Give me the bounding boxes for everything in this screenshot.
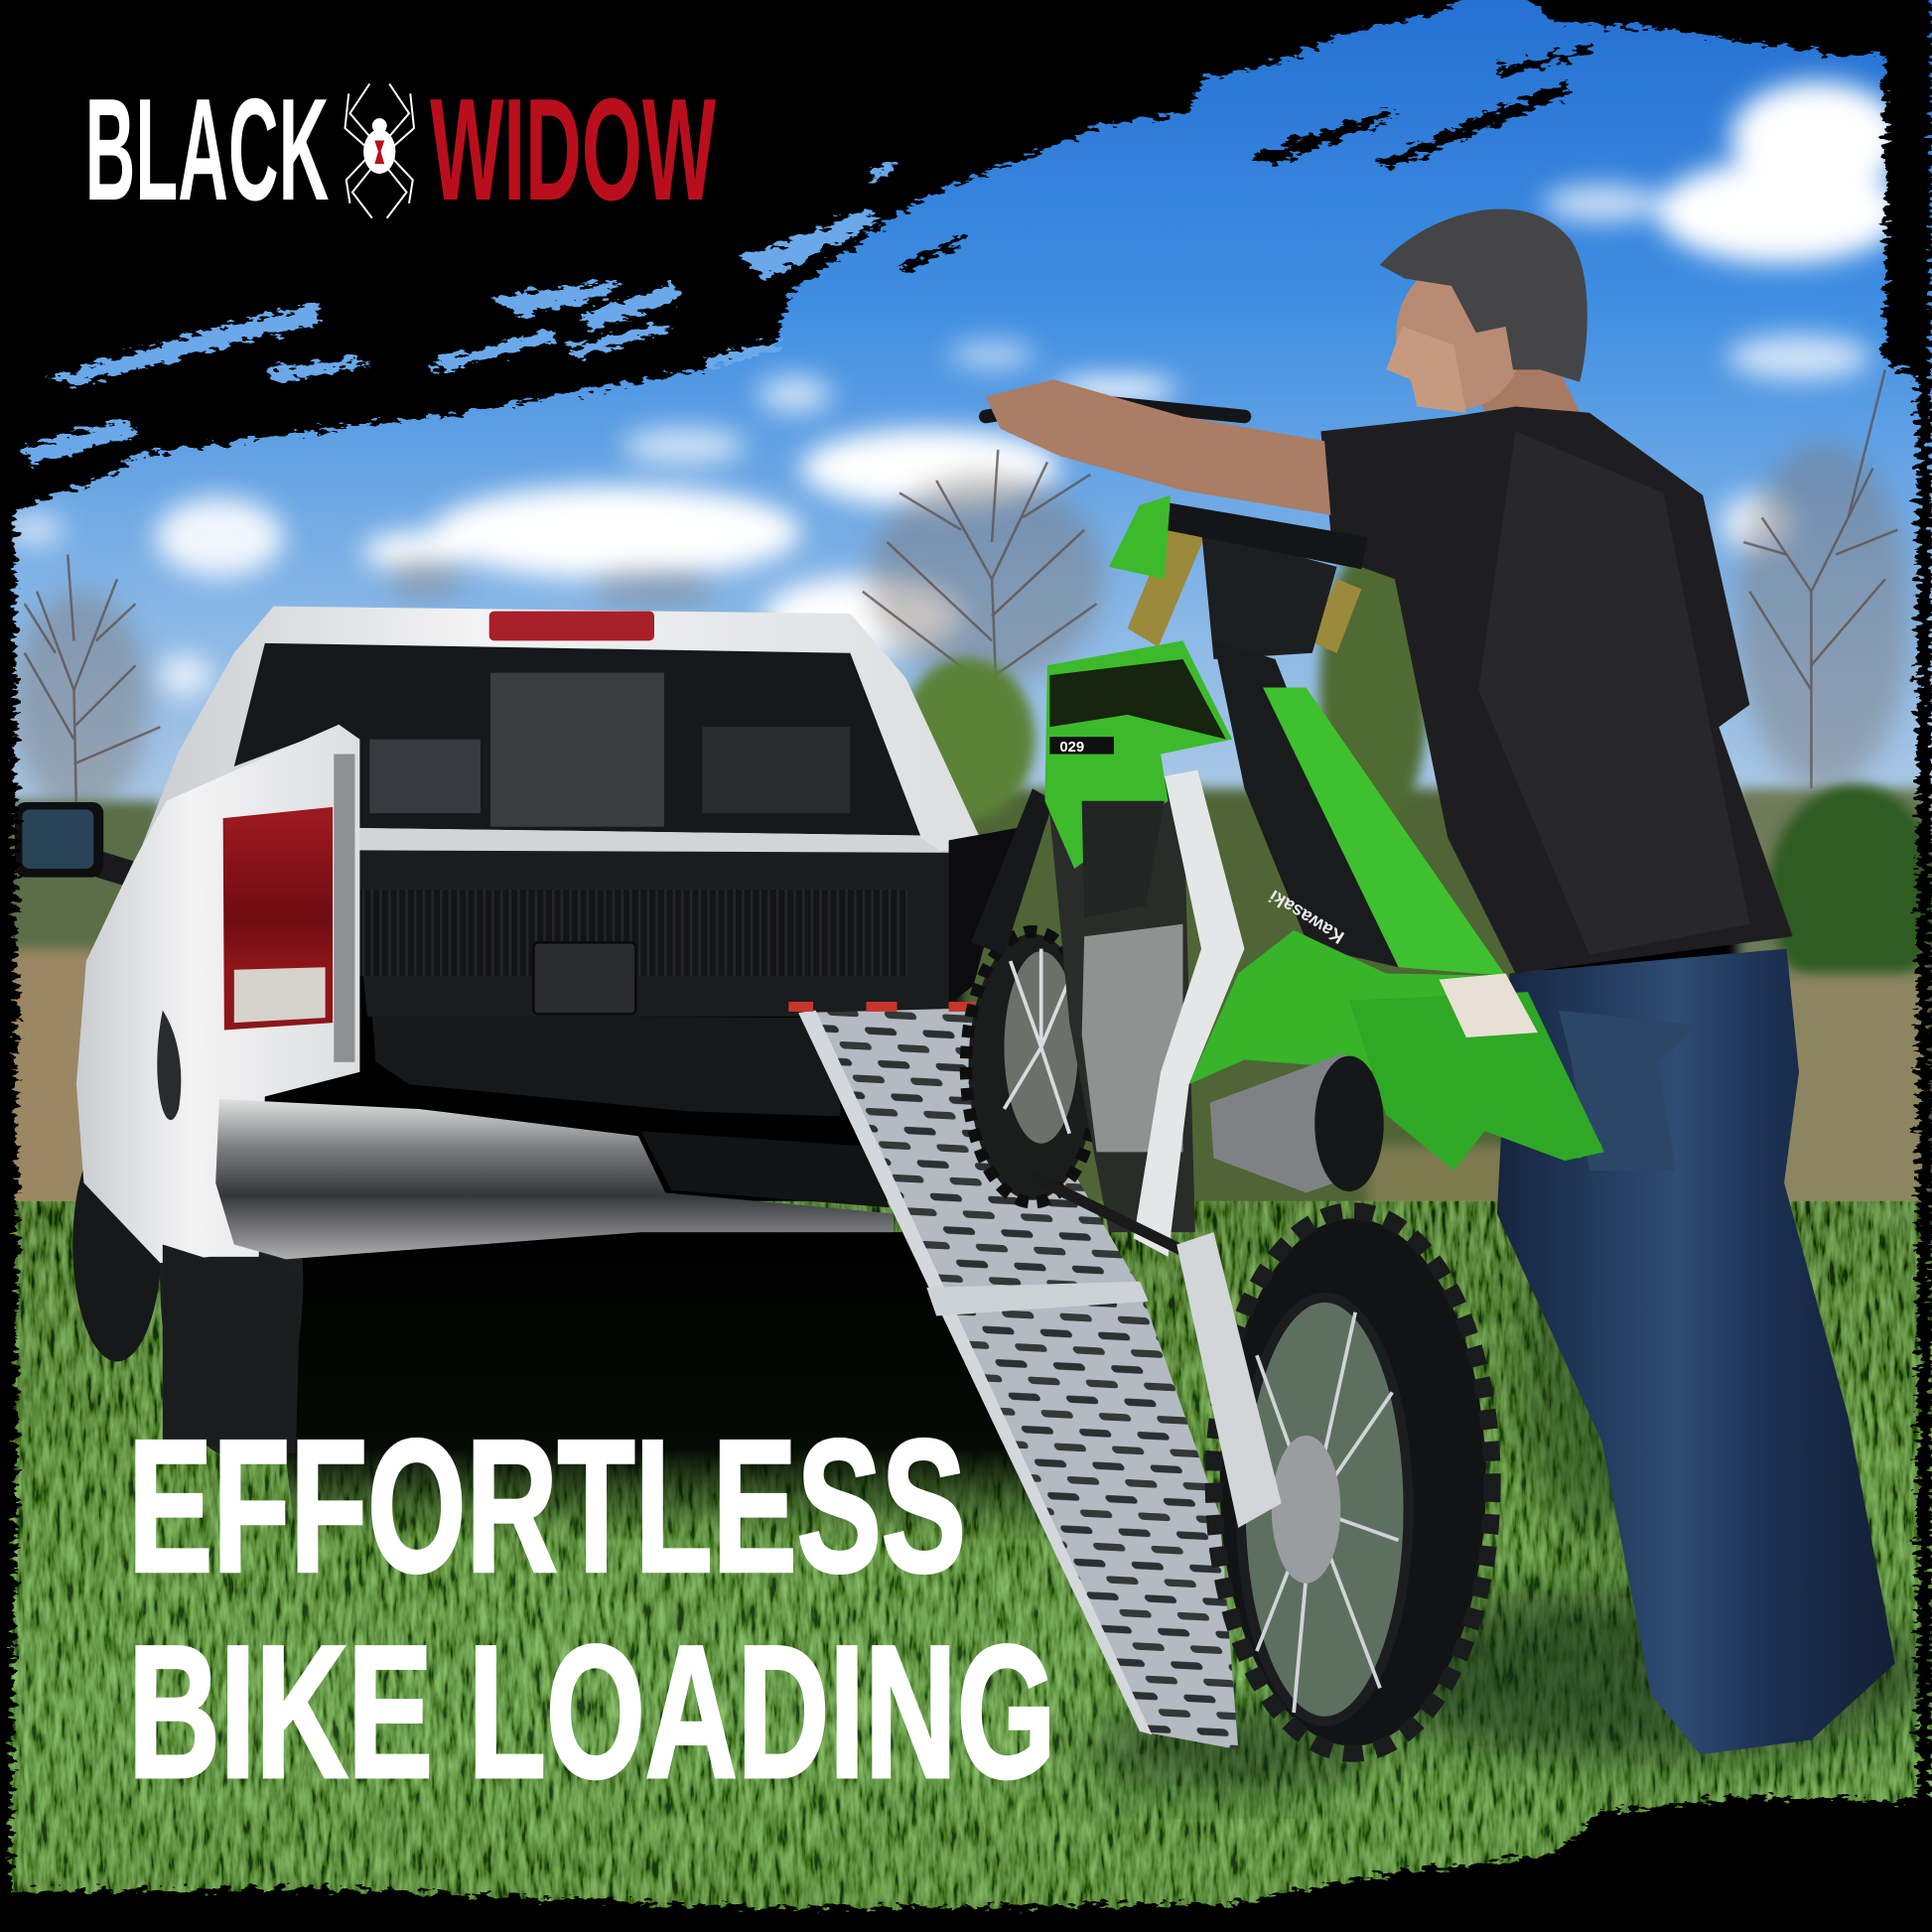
rear window: [234, 643, 920, 835]
rear tire: [160, 1106, 303, 1456]
wheel arch: [157, 1011, 181, 1120]
neck: [1466, 345, 1584, 425]
hair: [1380, 209, 1587, 382]
front fork: [971, 788, 1053, 955]
mid-ground backdrop behind bike: [961, 788, 1540, 1220]
bumper: [215, 1099, 894, 1259]
loading ramp: [788, 1002, 1238, 1749]
fender sticker: [1440, 973, 1538, 1037]
tailgate: [372, 1016, 840, 1116]
ramp deck: [798, 1008, 1238, 1749]
side body: [76, 725, 359, 1263]
headlight plate: [1165, 502, 1368, 569]
sky: [0, 0, 1932, 863]
fork clamp: [1201, 530, 1337, 659]
seat brand text: Kawasaki: [1265, 886, 1347, 948]
bed interior: [351, 850, 955, 1017]
jeans: [1497, 949, 1895, 1754]
rider body: [1320, 209, 1895, 1754]
taillight: [223, 807, 333, 1031]
engine: [1082, 924, 1182, 1152]
cab: [136, 607, 986, 863]
cab reflection: [369, 727, 850, 813]
shirt: [1320, 407, 1793, 973]
ramp hooks: [788, 1002, 976, 1012]
top black brush stroke: [0, 0, 1484, 517]
front tire: [72, 1128, 162, 1361]
side panel: [1189, 930, 1601, 1159]
seat green stripe: [1263, 688, 1506, 976]
pickup truck: [15, 607, 1059, 1540]
exhaust muffler: [1210, 1053, 1384, 1192]
headline line 1: EFFORTLESS: [128, 1401, 966, 1611]
headline: [128, 1401, 1056, 1818]
frame: [1134, 770, 1244, 1257]
back pocket: [1559, 1011, 1698, 1171]
rear wheel: [1213, 1211, 1492, 1753]
window slider: [490, 673, 664, 827]
tailgate edge: [334, 755, 354, 1062]
number plate: [1049, 737, 1114, 756]
handlebar: [986, 400, 1244, 416]
headline line 2: BIKE LOADING: [128, 1607, 1056, 1818]
brake light: [489, 612, 654, 640]
tank graphic: [1049, 659, 1226, 740]
clouds: [5, 81, 1903, 695]
ramp side rail: [798, 1011, 1152, 1734]
upper forks: [1128, 523, 1361, 653]
number plate: 029: [1059, 740, 1084, 756]
logo word WIDOW: WIDOW: [430, 69, 716, 231]
rear fender: [1349, 992, 1604, 1171]
dirt bike: [966, 400, 1604, 1753]
rider arm: [986, 379, 1330, 515]
icon: spider: [345, 83, 414, 218]
head: [1380, 209, 1587, 413]
truck ground shadow: [259, 1232, 1059, 1540]
front fender shroud: [1044, 640, 1232, 869]
rear tire tread overlap: [163, 1244, 301, 1453]
sky gaps in brush: [25, 160, 896, 466]
ram badge panel: [533, 942, 635, 1014]
chain: [1033, 1176, 1182, 1251]
logo: BLACK: [85, 69, 329, 231]
bed rail: [354, 828, 942, 853]
far bed side: [949, 828, 1017, 1004]
side mirror: [15, 802, 138, 888]
seat: [1213, 640, 1399, 967]
ramp hinge: [926, 1282, 1149, 1315]
under-bumper dark: [640, 1131, 890, 1207]
swingarm: [1176, 1232, 1282, 1528]
front wheel: [966, 931, 1099, 1202]
engine shadow: [1047, 776, 1195, 1232]
background trees and bushes: [0, 369, 1932, 1220]
lawn: [0, 1201, 1932, 1932]
